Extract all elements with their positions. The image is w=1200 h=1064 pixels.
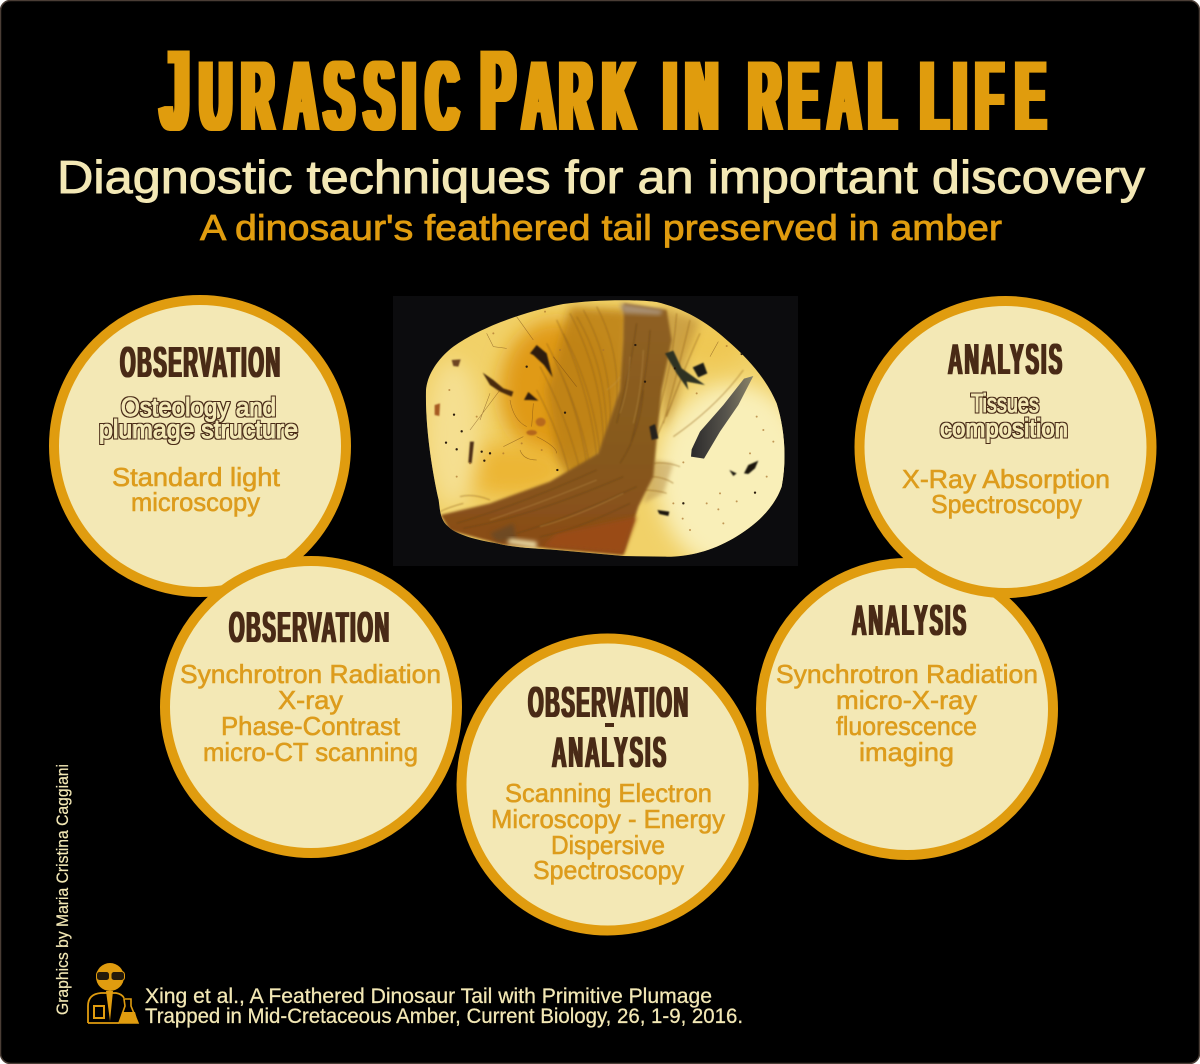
panel: observation, light microscopy <box>54 300 346 592</box>
heading: observation: OBSERVATION <box>120 338 280 387</box>
title: LIFE <box>921 42 1045 152</box>
citation <box>145 985 743 1028</box>
technique: synchrotron radiation: Synchrotron Radiation <box>180 659 441 689</box>
technique: synchrotron radiation 2: Synchrotron Radiation <box>776 659 1038 689</box>
technique: scanning electron: Scanning Electron <box>505 778 712 808</box>
technique: imaging: imaging <box>859 737 954 767</box>
citation line 2: Trapped in Mid-Cretaceous Amber, Current Biology, 26, 1-9, 2016. <box>145 1005 743 1028</box>
credit text: Graphics by Maria Cristina Caggiani <box>53 764 72 1015</box>
tail <box>441 303 672 555</box>
technique: fluorescence: fluorescence <box>836 711 977 741</box>
outlined text: plumage: plumage structure <box>99 414 298 444</box>
title <box>161 26 1045 155</box>
heading: analysis 3: ANALYSIS <box>552 728 666 777</box>
outlined text: composition: composition <box>940 413 1068 443</box>
technique: standard light: Standard light <box>112 462 281 492</box>
technique: micro x-ray: micro-X-ray <box>836 685 977 715</box>
heading dash <box>605 723 614 727</box>
outlined text: osteology: Osteology and <box>121 392 276 422</box>
heading: observation 3: OBSERVATION <box>528 678 688 727</box>
technique: micro-ct: micro-CT scanning <box>203 737 418 767</box>
technique: x-ray absorption: X-Ray Absorption <box>902 464 1110 494</box>
technique: microscopy: microscopy <box>131 487 260 517</box>
panel: observation, synchrotron <box>165 561 457 853</box>
panel: observation-analysis <box>462 638 754 930</box>
title: P <box>481 26 515 155</box>
outlined text: tissues: Tissues <box>971 388 1039 418</box>
title: URASSIC <box>200 42 458 152</box>
technique: microscopy energy: Microscopy - Energy <box>491 804 725 834</box>
title: ARK <box>523 42 634 152</box>
amber photograph <box>393 296 810 570</box>
amber inclusions <box>691 376 753 459</box>
subtitle: Diagnostic techniques for an important discovery <box>57 151 1145 203</box>
icon: scientist with flask <box>88 963 138 1023</box>
panel: analysis, x-ray absorption <box>860 301 1152 593</box>
citation line 1: Xing et al., A Feathered Dinosaur Tail with Primitive Plumage <box>145 985 712 1008</box>
title: J <box>161 26 189 155</box>
panel: analysis, synchrotron fluorescence <box>761 563 1053 855</box>
technique: spectroscopy 2: Spectroscopy <box>931 489 1082 519</box>
technique: spectroscopy: Spectroscopy <box>533 855 684 885</box>
heading: analysis 4: ANALYSIS <box>852 596 966 645</box>
technique: dispersive: Dispersive <box>551 830 665 860</box>
title: REAL <box>749 42 896 152</box>
feather fan <box>547 307 630 487</box>
heading: analysis: ANALYSIS <box>948 335 1062 384</box>
heading: observation 2: OBSERVATION <box>229 603 389 652</box>
secondary subtitle: A dinosaur's feathered tail preserved in amber <box>200 207 1002 248</box>
technique: x-ray: X-ray <box>278 685 343 715</box>
title: IN <box>664 42 717 152</box>
technique: phase contrast: Phase-Contrast <box>221 711 401 741</box>
